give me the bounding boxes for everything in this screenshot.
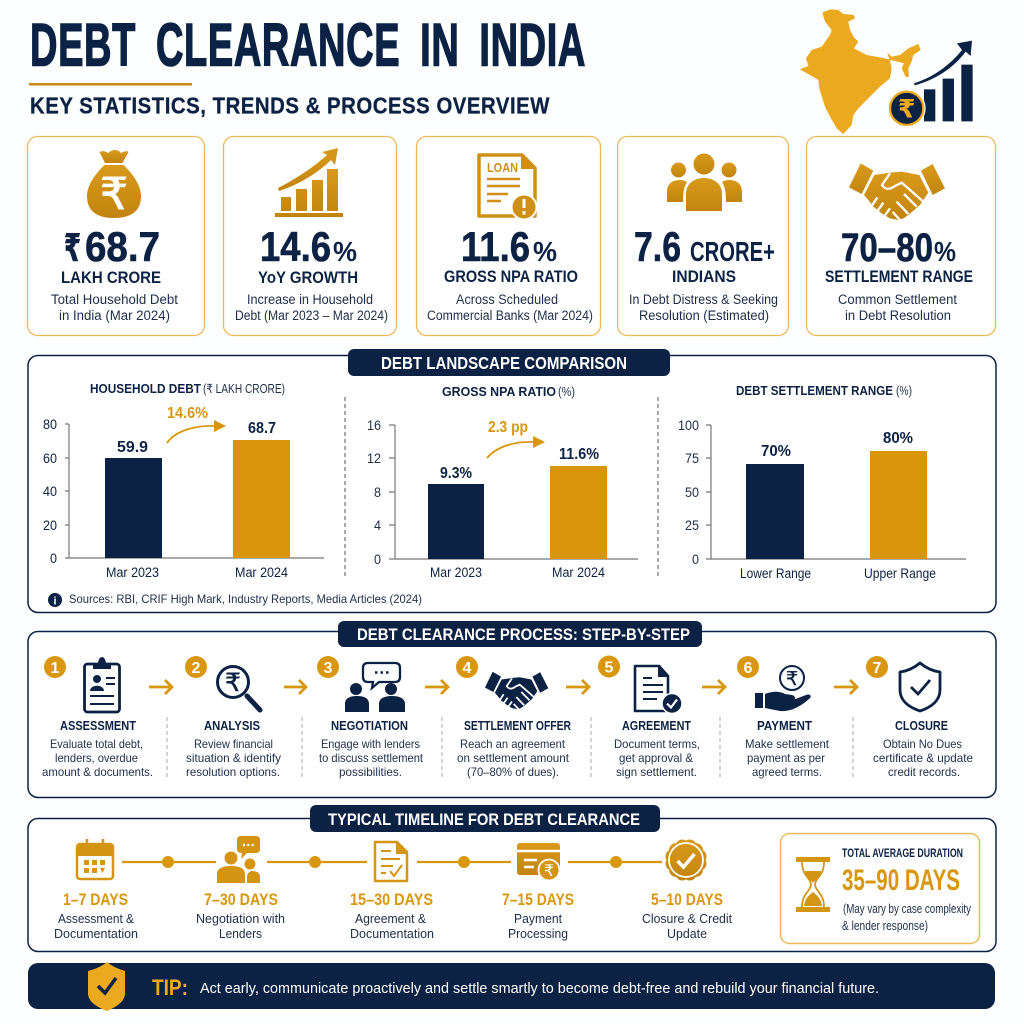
panel: debt landscape comparison [28,349,996,612]
icon: growth chart [275,148,343,217]
icon: money bag: ₹ [100,170,128,219]
step 2: analysis: resolution options. [186,765,280,779]
icon: shield check [900,663,940,711]
icon: India map with rupee coin and growth bars: ₹ [898,95,915,123]
panel: debt clearance process [28,621,996,798]
arrow [702,680,725,694]
panel: Indians in distress stat [618,136,788,336]
tip banner [28,962,995,1011]
step 4: settlement offer: (70–80% of dues). [467,765,559,779]
icon: loan document with alert: LOAN [487,161,518,175]
stat description: Increase in Household [247,292,373,307]
chart: gross NPA ratio: 8 [374,484,381,500]
stat value: ₹ [64,228,81,270]
chart: household debt: 68.7 [248,420,276,437]
stat description [427,292,593,323]
step 6: payment: payment as per [747,751,825,765]
stat label: SETTLEMENT RANGE [825,267,973,286]
chart: household debt: 20 [43,517,57,533]
step 1: assessment: lenders, overdue [55,751,138,765]
tip banner: TIP: [152,975,188,1000]
callout: total average duration: TOTAL AVERAGE DURATION [842,846,963,860]
chart: household debt: 59.9 [117,439,148,456]
chart: household debt: Mar 2024 [235,565,288,580]
chart: debt settlement range [678,384,966,581]
icon: calendar [77,839,113,879]
icon: money bag [87,150,141,219]
stat description: in India (Mar 2024) [59,308,170,323]
chart: household debt: Mar 2023 [106,565,159,580]
icon: handshake [849,163,945,220]
milestone 5 [642,839,732,941]
milestone 2 [196,836,285,941]
milestone 1: Assessment & [58,911,134,926]
sources note: Sources: RBI, CRIF High Mark, Industry Reports, Media Articles (2024) [69,592,422,606]
milestone 2: 7–30 DAYS [204,890,278,909]
milestone 4: Payment [514,911,562,926]
icon: shield check [88,962,125,1011]
panel: household debt stat [28,136,204,336]
panel: typical timeline [28,805,996,952]
stat description [235,292,388,323]
chart: household debt: 40 [43,483,57,499]
chart: household debt: HOUSEHOLD DEBT [90,382,201,396]
stat description: Resolution (Estimated) [639,308,769,323]
icon: India map with rupee coin and growth bars [800,9,973,134]
icon: hourglass [796,857,830,912]
stat description: In Debt Distress & Seeking [629,292,778,307]
step 1: assessment: Evaluate total debt, [50,737,143,751]
chart: debt settlement range: 100 [678,417,699,433]
milestone 5: Closure & Credit [642,911,732,926]
step 7: closure: CLOSURE [895,719,948,733]
milestone 5: 5–10 DAYS [651,890,723,909]
chart: debt settlement range: DEBT SETTLEMENT RANGE [736,384,893,398]
stat description: in Debt Resolution [845,308,951,323]
step 4: settlement offer: 4 [463,660,472,677]
step 1: assessment: ASSESSMENT [60,719,136,733]
step 2: analysis: ANALYSIS [204,719,260,733]
milestone 1: Documentation [54,926,138,941]
milestone 2: Negotiation with [196,911,285,926]
stat value: 68.7 [85,223,160,270]
milestone 5: Update [667,926,707,941]
milestone 4: 7–15 DAYS [502,890,574,909]
stat description: Common Settlement [838,292,957,307]
chart: gross NPA ratio [367,385,638,580]
milestone 4 [502,843,574,941]
arrow [284,680,306,694]
stat label: LAKH CRORE [61,268,161,287]
step 1: assessment [42,656,153,779]
step 7: closure [866,656,973,779]
icon: magnifier with rupee: ₹ [225,669,241,697]
step 5: agreement: sign settlement. [616,765,697,779]
chart: gross NPA ratio: 16 [367,417,381,433]
stat description [51,292,178,323]
chart: debt settlement range: 25 [685,517,699,533]
chart: gross NPA ratio: 0 [374,551,381,567]
step 7: closure: Obtain No Dues [883,737,962,751]
chart: gross NPA ratio: 9.3% [440,465,472,482]
subtitle: KEY STATISTICS, TRENDS & PROCESS OVERVIEW [30,92,550,118]
chart: debt settlement range: 50 [685,484,699,500]
step 3: negotiation: possibilities. [339,765,402,779]
callout: total average duration: (May vary by case complexity [843,902,972,916]
milestone 3: Documentation [350,926,434,941]
step 7: closure: 7 [873,660,882,677]
step 1: assessment: amount & documents. [42,765,153,779]
chart: gross NPA ratio: 4 [374,517,381,533]
chart: debt settlement range: 0 [692,551,699,567]
milestone 1 [54,839,138,941]
chart: debt settlement range: Lower Range [740,566,811,581]
panel: settlement range stat [806,136,996,336]
icon: badge with check [665,839,707,881]
step 2: analysis: 2 [192,660,201,677]
stat label: YoY GROWTH [258,268,358,287]
stat description [838,292,957,323]
stat value: % [533,236,557,267]
chart: gross NPA ratio: (%) [558,385,575,399]
stat description [629,292,778,323]
chart: gross NPA ratio: 12 [367,450,381,466]
step 6: payment: agreed terms. [752,765,822,779]
chart: debt settlement range: (%) [896,384,912,398]
stat description: Debt (Mar 2023 – Mar 2024) [235,308,388,323]
chart: debt settlement range: 70% [761,443,791,460]
stat value: % [333,236,357,267]
stat value: 70–80 [841,226,933,270]
milestone 2: Lenders [219,926,262,941]
arrow [149,680,172,694]
stat value [634,223,775,270]
step 3: negotiation: 3 [324,660,333,677]
stat value: 7.6 [634,223,681,270]
icon: loan document with alert [479,155,536,220]
step 6: payment: 6 [744,660,753,677]
stat value: 11.6 [461,223,530,270]
step 6: payment: PAYMENT [757,719,812,733]
step 5: agreement: get approval & [619,751,693,765]
milestone 3 [350,842,434,941]
step 7: closure: credit records. [888,765,960,779]
icon: document checklist [375,842,408,881]
section heading [338,621,702,647]
step 4: settlement offer: Reach an agreement [460,737,566,751]
chart: debt settlement range: Upper Range [864,566,936,581]
section heading: DEBT LANDSCAPE COMPARISON [381,353,627,373]
icon: hand with rupee coin: ₹ [786,669,798,690]
step 1: assessment: 1 [51,660,60,677]
section heading [348,349,670,376]
step 4: settlement offer: SETTLEMENT OFFER [464,719,571,733]
step 7: closure: certificate & update [873,751,973,765]
stat value: 14.6 [260,223,331,270]
icon: document with check [635,665,682,714]
chart: household debt: 80 [43,416,57,432]
step 6: payment [737,656,830,779]
arrow [834,680,857,694]
stat description: Total Household Debt [51,292,178,307]
chart: gross NPA ratio: GROSS NPA RATIO [442,385,556,399]
arrow [425,680,448,694]
chart: household debt: 14.6% [167,405,208,422]
step 5: agreement: AGREEMENT [622,719,691,733]
stat label: GROSS NPA RATIO [444,267,578,286]
section heading: TYPICAL TIMELINE FOR DEBT CLEARANCE [328,810,640,829]
chart: household debt: 0 [50,550,57,566]
panel: YoY growth stat [224,136,396,336]
title: DEBT CLEARANCE IN INDIA [30,10,586,78]
chart: gross NPA ratio: 11.6% [559,446,599,463]
icon: payment card with rupee: ₹ [544,863,554,880]
step 4: settlement offer [456,656,571,779]
chart: household debt: 60 [43,450,57,466]
callout: total average duration: 35–90 DAYS [842,864,960,897]
chart: gross NPA ratio: 2.3 pp [488,419,528,436]
stat description: Across Scheduled [456,292,558,307]
chart: gross NPA ratio: Mar 2024 [552,565,605,580]
step 5: agreement: Document terms, [614,737,700,751]
step 3: negotiation: NEGOTIATION [331,719,408,733]
step 2: analysis [185,656,281,779]
section heading: DEBT CLEARANCE PROCESS: STEP-BY-STEP [357,625,690,644]
icon: handshake [485,672,548,709]
icon: people with chat bubble [217,836,260,883]
step 5: agreement [598,656,700,779]
milestone 3: Agreement & [355,911,426,926]
step 3: negotiation [317,656,424,779]
chart: household debt [43,382,324,580]
icon: clipboard [84,657,120,712]
step 4: settlement offer: on settlement amount [457,751,570,765]
step 6: payment: Make settlement [745,737,830,751]
icon: people group [667,154,742,211]
stat label: INDIANS [672,267,736,286]
callout: total average duration [780,834,980,944]
panel: gross NPA ratio stat [416,136,600,336]
step 3: negotiation: Engage with lenders [321,737,420,751]
milestone 3: 15–30 DAYS [350,890,433,909]
step 2: analysis: situation & identify [186,751,281,765]
section heading [310,805,660,832]
stat description: Commercial Banks (Mar 2024) [427,308,593,323]
chart: household debt: (₹ LAKH CRORE) [203,382,285,396]
step 3: negotiation: to discuss settlement [319,751,424,765]
milestone 1: 1–7 DAYS [63,890,128,909]
stat value: % [934,236,956,267]
arrow [566,680,589,694]
milestone 4: Processing [508,926,568,941]
icon: two people talking [345,663,405,712]
chart: gross NPA ratio: Mar 2023 [430,565,482,580]
step 2: analysis: Review financial [194,737,273,751]
callout: total average duration: & lender response) [842,919,928,933]
sources note: i [54,596,57,608]
chart: debt settlement range: 80% [883,430,913,447]
timeline connector [122,856,662,868]
chart: debt settlement range: 75 [685,450,699,466]
step 5: agreement: 5 [605,660,614,676]
tip banner: Act early, communicate proactively and settle smartly to become debt-free and rebuild your financial future. [200,981,879,997]
stat value: CRORE+ [690,236,775,267]
